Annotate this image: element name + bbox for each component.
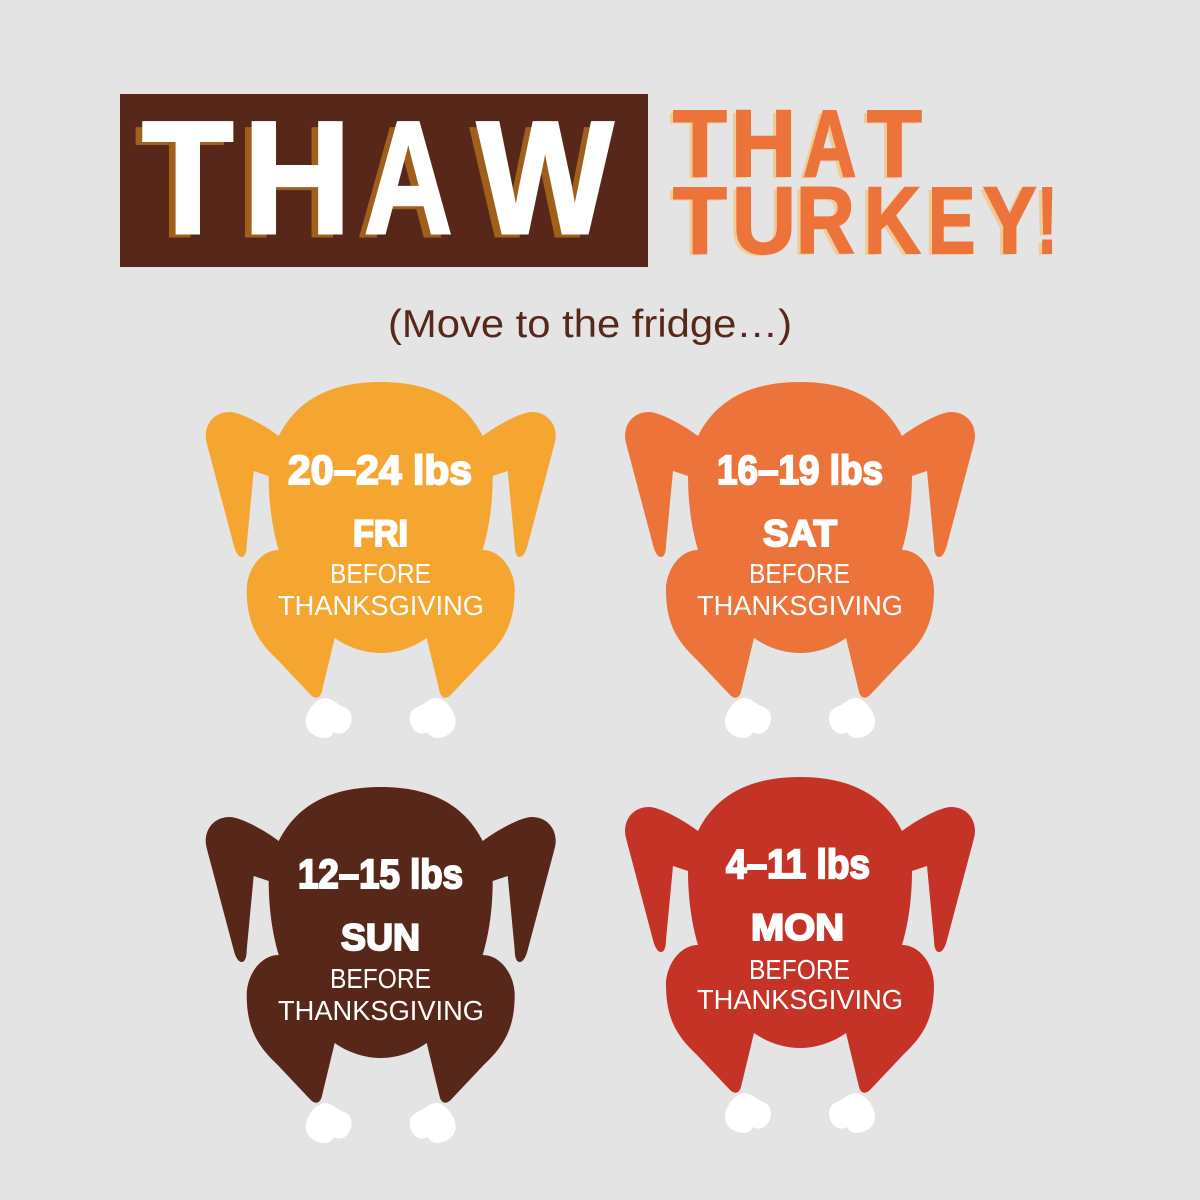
drumstick: right [410,698,456,738]
before thanksgiving text: BEFORE [749,558,850,589]
day label: SAT [763,513,837,554]
drumstick: left [725,1093,771,1133]
turkey: 16–19 lbs [625,382,975,738]
title banner: THAW: A [364,89,453,268]
title: THAT TURKEY!: U [732,168,795,274]
turkey body: yellow [206,382,556,698]
thanksgiving text: THANKSGIVING [697,984,903,1015]
turkey: 20–24 lbs [206,382,556,738]
title: THAT TURKEY!: Y [983,168,1036,274]
title banner: THAW: T [142,89,234,268]
turkey body: brown [206,787,556,1103]
weight label: 20–24 lbs [288,447,472,493]
drumstick: left [725,698,771,738]
before thanksgiving text: BEFORE [749,954,850,985]
title banner: THAW: W [476,89,613,268]
day label: MON [751,907,844,948]
title: THAT TURKEY!: T [867,91,922,197]
title: THAT TURKEY! [670,91,1058,274]
subtitle: (Move to the fridge…) [388,303,792,346]
weight label: 12–15 lbs [298,851,463,897]
turkey body: orange [625,382,975,698]
before thanksgiving text: BEFORE [330,558,431,589]
title: THAT TURKEY!: K [864,168,920,274]
drumstick: right [410,1103,456,1143]
title: THAT TURKEY!: T [672,168,726,274]
turkey body: red [625,777,975,1093]
drumstick: left [306,1103,352,1143]
turkey: 4–11 lbs [625,777,975,1133]
thanksgiving text: THANKSGIVING [278,590,484,621]
drumstick: left [306,698,352,738]
title: THAT TURKEY!: T [672,91,726,197]
title: THAT TURKEY!: R [796,168,855,274]
thanksgiving text: THANKSGIVING [278,995,484,1026]
day label: SUN [341,917,420,958]
title: THAT TURKEY!: ! [1037,168,1058,274]
title banner: THAW: H [243,89,352,268]
title: THAT TURKEY!: H [731,91,796,197]
weight label: 16–19 lbs [717,447,883,493]
turkey: 12–15 lbs [206,787,556,1143]
drumstick: right [829,1093,875,1133]
day label: FRI [353,513,408,554]
thanksgiving text: THANKSGIVING [697,590,903,621]
weight label: 4–11 lbs [726,841,870,887]
before thanksgiving text: BEFORE [330,963,431,994]
drumstick: right [829,698,875,738]
title: THAT TURKEY!: E [928,168,975,274]
title banner: THAW [120,94,648,267]
title: THAT TURKEY!: A [803,91,856,197]
